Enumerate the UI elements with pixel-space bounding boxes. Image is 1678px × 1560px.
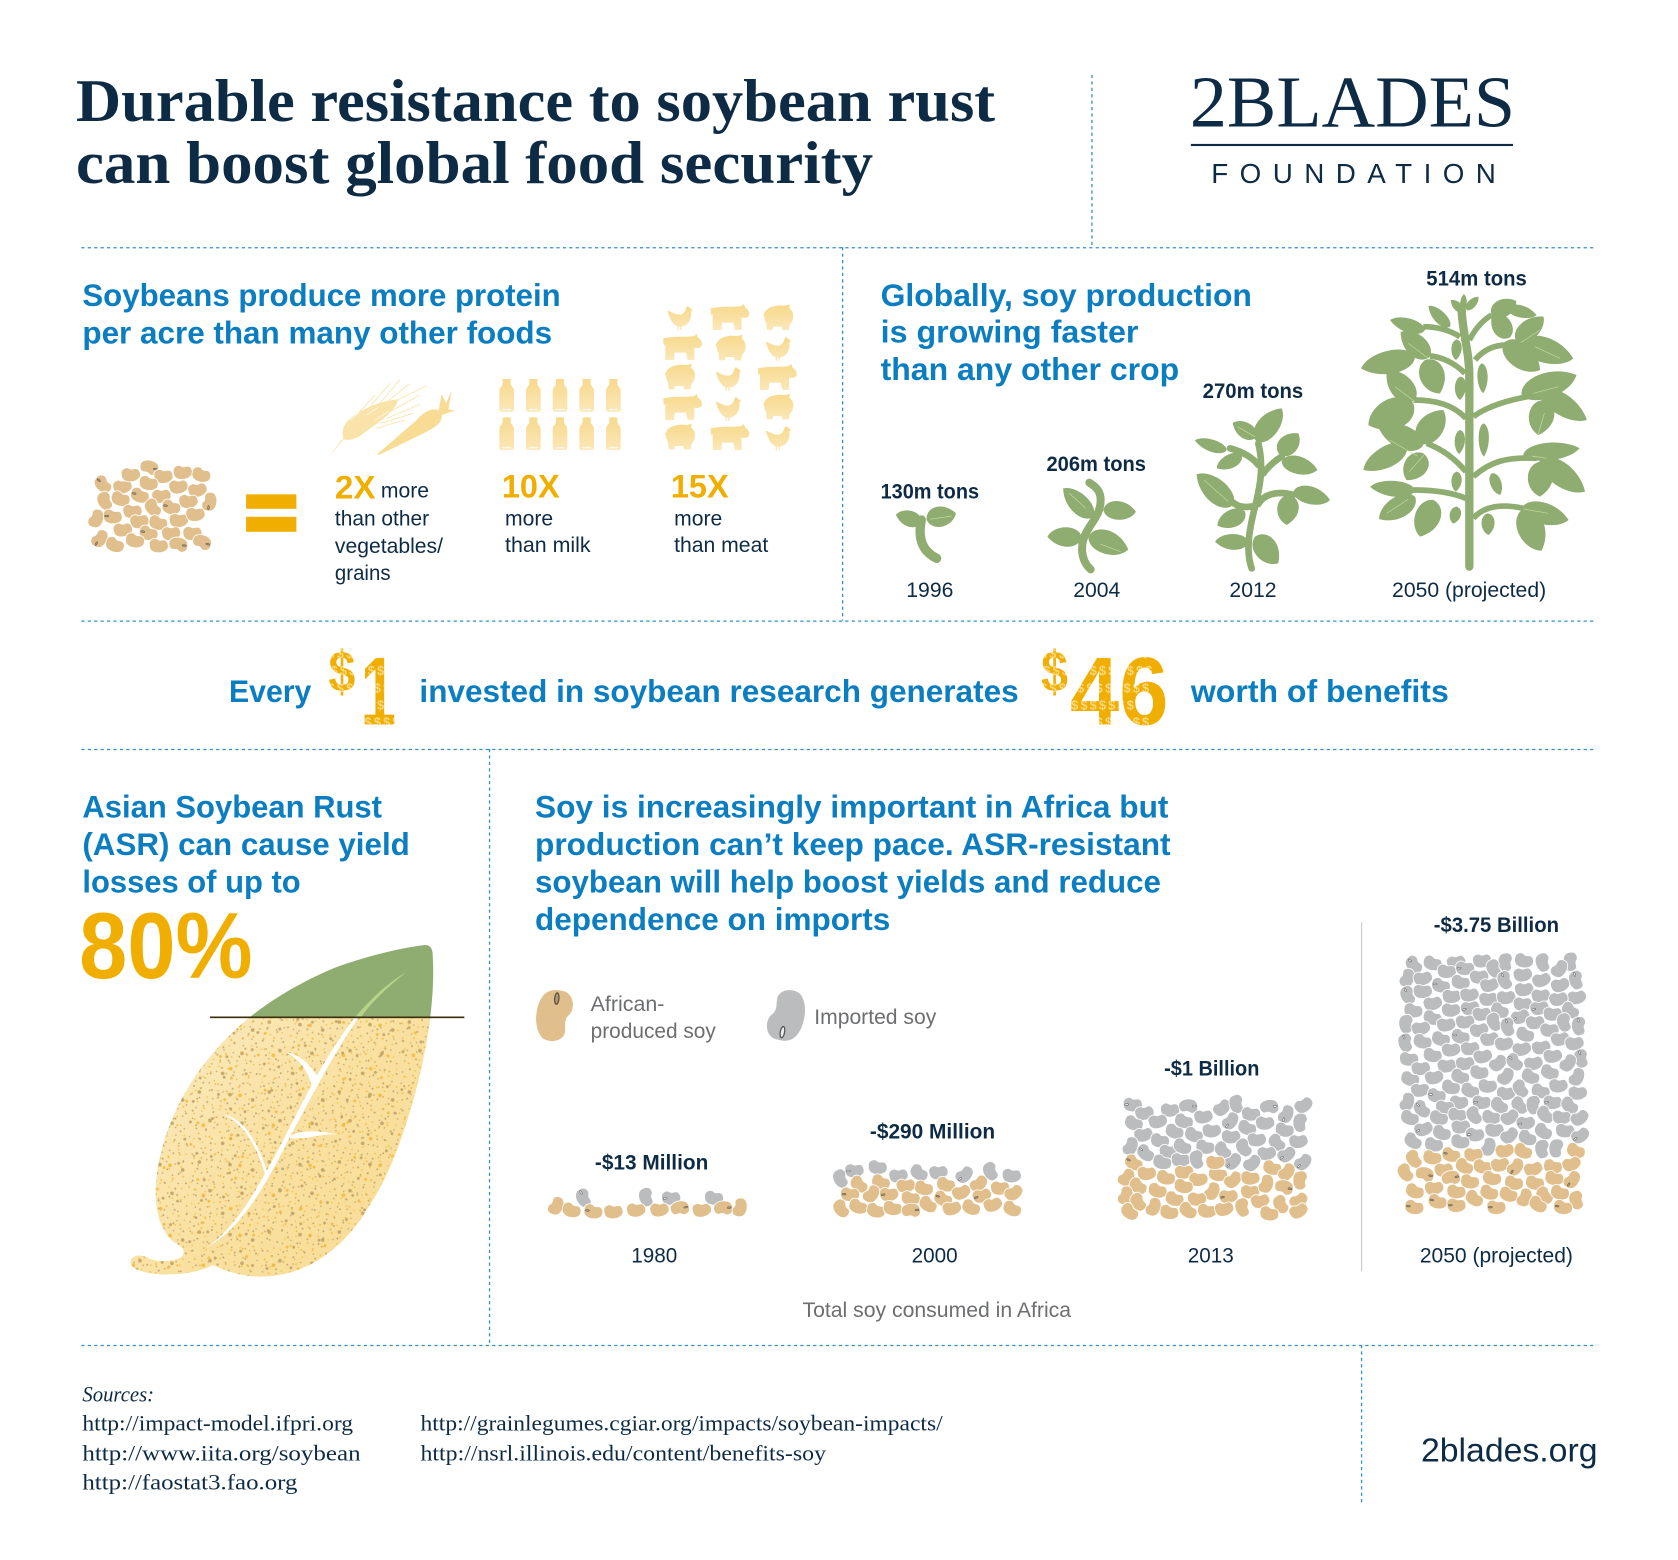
caption: Total soy consumed in Africa <box>803 1299 1071 1322</box>
icon: diseased leaf <box>131 945 464 1277</box>
heading: ASR: Asian Soybean Rust <box>82 789 382 824</box>
website: 2blades.org <box>1421 1433 1598 1470</box>
banner: return on investment: $$$$$$$$$$$$ <box>1040 715 1151 730</box>
heading: Africa: dependence on imports <box>535 902 890 937</box>
sources: http://impact-model.ifpri.org <box>82 1411 353 1436</box>
banner: return on investment: 46 <box>1070 638 1168 745</box>
banner: return on investment: invested in soybean research generates <box>419 674 1019 709</box>
heading: protein: Soybeans produce more protein <box>82 278 561 313</box>
stat: 80%: 80% <box>79 893 253 998</box>
heading: production: Globally, soy production <box>881 278 1252 313</box>
year: 2004: 2004 <box>1073 579 1120 602</box>
plant 2012 <box>1189 402 1332 571</box>
year: 2000: 2000 <box>912 1245 958 1268</box>
label: -$13 Million: -$13 Million <box>595 1152 708 1175</box>
banner: return on investment: $$$$$$$$ <box>331 697 405 712</box>
sources: http://nsrl.illinois.edu/content/benefits-soy <box>421 1441 826 1466</box>
heading: production: is growing faster <box>881 314 1138 349</box>
heading: production: than any other crop <box>881 352 1179 387</box>
sources <box>82 1382 944 1494</box>
heading: Africa: production can’t keep pace. ASR-resistant <box>535 827 1171 862</box>
title: can boost global food security <box>76 130 873 196</box>
heading: Africa <box>535 789 1171 937</box>
icon: soybean pile <box>87 459 218 554</box>
stat: 2X: vegetables/ <box>335 535 443 558</box>
year: 2013: 2013 <box>1188 1245 1234 1268</box>
header <box>76 61 1515 196</box>
icon: wheat and carrot <box>330 379 455 457</box>
heading: ASR: losses of up to <box>82 864 301 899</box>
logo: 2Blades Foundation: FOUNDATION <box>1211 158 1496 189</box>
stat: 10X: 10X <box>502 469 560 505</box>
banner: return on investment: $$$$$$$$$$$$ <box>1040 646 1151 661</box>
year: 2050 projected: 2050 (projected) <box>1392 579 1546 602</box>
pile: 2013 <box>1115 1093 1316 1223</box>
stat: 10X <box>502 469 591 557</box>
plant 2004 <box>1047 482 1136 569</box>
panel: yield losses <box>79 789 464 1277</box>
year: 2050 projected: 2050 (projected) <box>1420 1245 1573 1268</box>
icon: milk bottles <box>499 379 621 450</box>
heading: ASR: (ASR) can cause yield <box>82 827 410 862</box>
label: 206m tons: 206m tons <box>1046 453 1146 476</box>
banner: return on investment: $ <box>328 640 355 704</box>
heading: protein: per acre than many other foods <box>82 315 552 350</box>
banner: return on investment: $$$$$$$$ <box>327 680 402 695</box>
stat: 15X: 15X <box>671 469 729 505</box>
stat: 2X: than other <box>335 507 429 530</box>
panel: Africa <box>533 789 1592 1322</box>
year: 2012: 2012 <box>1229 579 1277 602</box>
sources: Sources: <box>82 1382 154 1407</box>
label: -$1 Billion: -$1 Billion <box>1164 1057 1259 1080</box>
banner: return on investment <box>231 648 1448 726</box>
label: 270m tons: 270m tons <box>1203 380 1303 403</box>
stat: 10X: than milk <box>505 534 591 557</box>
banner: return on investment: worth of benefits <box>1190 674 1449 709</box>
equals sign <box>246 494 296 532</box>
title <box>76 68 995 196</box>
heading: Africa: Soy is increasingly important in Africa but <box>535 789 1168 824</box>
label: -$290 Million: -$290 Million <box>870 1120 995 1143</box>
plant 1996 <box>894 503 958 558</box>
panel: protein per acre <box>82 278 797 585</box>
legend: produced soy <box>591 1020 716 1043</box>
banner: return on investment: 1 <box>361 638 396 745</box>
heading: production <box>881 278 1252 387</box>
sources: http://faostat3.fao.org <box>82 1469 297 1494</box>
label: 514m tons: 514m tons <box>1426 268 1527 291</box>
heading: Africa: soybean will help boost yields and reduce <box>535 864 1161 899</box>
heading: ASR <box>82 789 410 899</box>
stat: 2X <box>335 470 443 585</box>
stat: 15X <box>671 469 768 557</box>
stat: 10X: more <box>505 507 553 530</box>
pile: 2050 projected <box>1394 951 1592 1216</box>
icon: farm animals <box>663 304 797 450</box>
banner: return on investment: $$$$$$$$ <box>327 715 402 730</box>
legend: African- <box>591 993 665 1016</box>
sources: http://www.iita.org/soybean <box>82 1441 361 1466</box>
banner: return on investment: $$$$$$$$$$$$ <box>1043 697 1155 712</box>
stat: 2X: more <box>381 480 429 503</box>
banner: return on investment: $$$$$$$$$$$$ <box>1043 663 1155 678</box>
stat: 15X: more <box>674 507 722 530</box>
plant 2050 <box>1358 293 1593 567</box>
legend: Imported soy <box>814 1006 937 1029</box>
banner: return on investment: $ <box>1041 640 1068 704</box>
label: -$3.75 Billion: -$3.75 Billion <box>1434 914 1559 937</box>
year: 1980: 1980 <box>631 1245 677 1268</box>
stat: 15X: than meat <box>674 534 768 557</box>
banner: return on investment: $$$$$$$$ <box>327 646 402 661</box>
banner: return on investment: Every <box>229 674 312 709</box>
sources: http://grainlegumes.cgiar.org/impacts/soybean-impacts/ <box>421 1411 944 1436</box>
stat: 2X: grains <box>335 562 391 585</box>
label: 130m tons: 130m tons <box>881 481 979 504</box>
logo: 2Blades Foundation <box>1190 61 1515 189</box>
pile: 2000 <box>830 1159 1026 1221</box>
banner: return on investment: $$$$$$$$ <box>331 663 405 678</box>
heading: protein <box>82 278 561 350</box>
title: Durable resistance to soybean rust <box>76 68 995 134</box>
stat: 2X: 2X <box>335 470 376 506</box>
panel: global production <box>881 268 1593 602</box>
banner: return on investment: $$$$$$$$$$$$ <box>1040 680 1151 695</box>
pile: 1980 <box>546 1186 748 1220</box>
logo: 2Blades Foundation: 2BLADES <box>1190 61 1515 142</box>
year: 1996: 1996 <box>906 579 953 602</box>
legend <box>533 986 937 1045</box>
